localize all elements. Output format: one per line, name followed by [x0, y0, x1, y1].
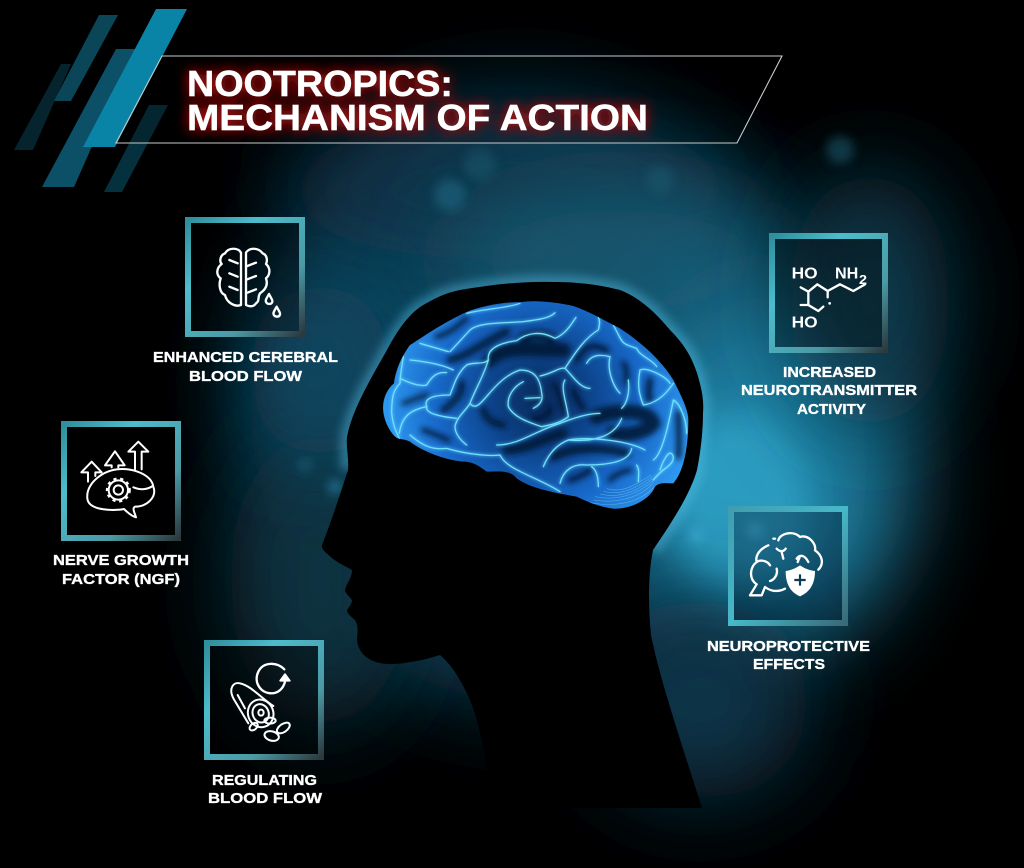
- label: [208, 772, 323, 807]
- panel: regulating blood flow: [207, 643, 323, 807]
- panel: enhanced cerebral blood flow: [153, 220, 338, 385]
- title banner: [116, 56, 782, 143]
- label: ACTIVITY: [797, 401, 866, 418]
- title stripes: [14, 9, 187, 192]
- label: INCREASED: [783, 364, 876, 381]
- frame: [188, 220, 302, 334]
- label: NEUROPROTECTIVE: [707, 638, 870, 655]
- label: REGULATING: [212, 772, 317, 789]
- icon: brain with shield: [750, 533, 822, 596]
- title: MECHANISM OF ACTION: [187, 97, 648, 138]
- icon: molecule: NH: [835, 265, 858, 282]
- icon: vessel and blood cells: [231, 664, 292, 742]
- panel: neuroprotective effects: [707, 509, 870, 673]
- label: NERVE GROWTH: [53, 552, 189, 569]
- title: [187, 63, 648, 138]
- icon: brain with drops: [217, 249, 280, 317]
- brain sulci: [403, 318, 679, 480]
- frame: [64, 424, 178, 538]
- panel: nerve growth factor: [53, 424, 189, 588]
- brain veins: [392, 303, 687, 492]
- label: EFFECTS: [753, 656, 825, 673]
- head silhouette: [322, 282, 703, 808]
- title: NOOTROPICS:: [187, 63, 453, 104]
- icon: molecule: 2: [859, 273, 867, 287]
- label: [741, 364, 917, 418]
- panel: increased neurotransmitter activity: [741, 236, 917, 418]
- label: [153, 349, 338, 385]
- background glow: [230, 100, 950, 800]
- label: [53, 552, 189, 588]
- cerebellum hatch: [590, 475, 654, 504]
- icon: brain with gear and arrows: [81, 442, 154, 517]
- frame: [772, 236, 885, 350]
- head glow: [347, 282, 703, 550]
- icon: molecule: HO: [792, 314, 818, 331]
- frame: [207, 643, 321, 757]
- label: BLOOD FLOW: [189, 368, 303, 385]
- label: BLOOD FLOW: [208, 790, 323, 807]
- icon: molecule: HO: [792, 265, 818, 282]
- label: [707, 638, 870, 673]
- label: FACTOR (NGF): [62, 571, 180, 588]
- icon: molecule: [792, 265, 867, 331]
- frame: [731, 509, 845, 623]
- brain: [383, 301, 688, 509]
- label: NEUROTRANSMITTER: [741, 382, 917, 399]
- label: ENHANCED CEREBRAL: [153, 349, 338, 366]
